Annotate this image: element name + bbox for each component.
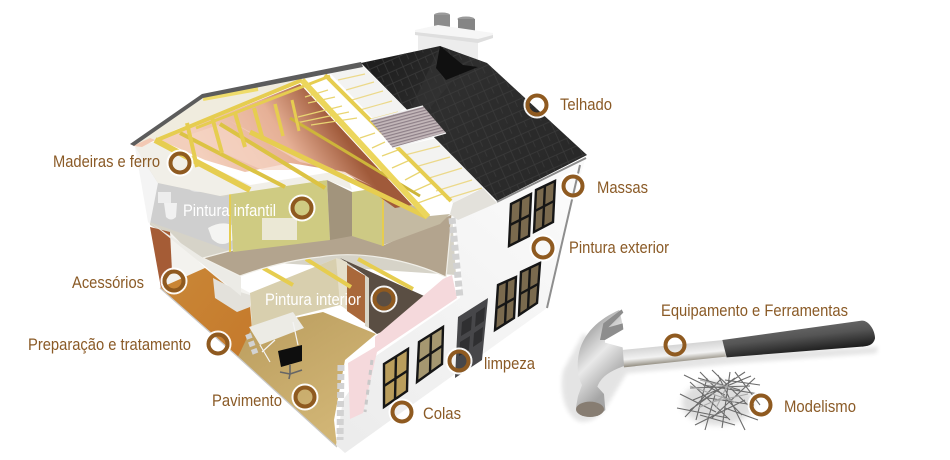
marker: Madeiras e ferro xyxy=(53,150,192,176)
marker: Pintura exterior xyxy=(530,236,669,260)
roof ridge fascia xyxy=(130,62,363,146)
hammer grip xyxy=(722,321,875,357)
upper floor carpet xyxy=(203,214,452,277)
attic timber frame xyxy=(155,75,451,217)
attic insulation boards xyxy=(186,120,372,186)
attic eave soffit xyxy=(133,72,330,146)
marker: Preparação e tratamento: Preparação e tratamento xyxy=(28,335,191,354)
gable ladder battens xyxy=(296,90,445,203)
interior back wall upper floor xyxy=(140,150,456,275)
black shingle roof xyxy=(361,46,587,202)
chimney xyxy=(415,12,493,67)
marker: Equipamento e Ferramentas xyxy=(661,301,848,354)
upper slab edge xyxy=(148,221,241,296)
pink wall insulation xyxy=(348,275,457,419)
wood floor xyxy=(160,268,252,357)
attic insulation xyxy=(160,84,412,208)
marker: Pintura exterior: Pintura exterior xyxy=(569,238,669,257)
marker: Colas: Colas xyxy=(423,404,461,423)
nails pile xyxy=(677,370,765,430)
office chair xyxy=(278,345,302,379)
exterior wall xyxy=(336,160,585,453)
marker: limpeza xyxy=(446,348,535,374)
marker: Pintura infantil xyxy=(183,196,314,220)
yellow green room walls xyxy=(230,180,450,252)
hammer head xyxy=(576,310,624,416)
desk xyxy=(249,312,304,362)
hammer striking face xyxy=(576,402,604,417)
marker: Pintura interior xyxy=(265,286,396,312)
marker: Acessórios xyxy=(72,268,186,294)
hammer claw xyxy=(600,309,623,340)
marker: Pintura infantil: Pintura infantil xyxy=(183,201,276,220)
eave pink tip xyxy=(133,138,155,147)
marker: Telhado: Telhado xyxy=(560,95,612,114)
marker: Equipamento e Ferramentas: Equipamento e Ferramentas xyxy=(661,301,848,320)
marker: Massas: Massas xyxy=(597,178,648,197)
hammer handle xyxy=(622,340,726,367)
marker: Modelismo: Modelismo xyxy=(784,397,856,416)
marker: Modelismo xyxy=(748,392,856,418)
hammer shadow xyxy=(562,333,878,422)
attic ceiling slab xyxy=(135,141,352,196)
roof battens xyxy=(338,74,482,199)
kitchen cabinet xyxy=(213,278,250,312)
marker: Telhado xyxy=(524,92,612,118)
marker: Pavimento: Pavimento xyxy=(212,391,282,410)
marker: Acessórios: Acessórios xyxy=(72,273,144,292)
windows xyxy=(384,181,555,407)
marker: limpeza: limpeza xyxy=(484,354,535,373)
marker: Massas xyxy=(560,174,648,198)
marker: Pintura interior: Pintura interior xyxy=(265,290,361,309)
bathroom wall xyxy=(135,147,234,252)
cut brick edges xyxy=(248,218,460,440)
hammer xyxy=(562,309,878,422)
floor edge xyxy=(160,288,337,447)
white insulated roof section xyxy=(330,64,483,203)
marker: Madeiras e ferro: Madeiras e ferro xyxy=(53,152,160,171)
marker: Pavimento xyxy=(212,384,318,410)
solar panel xyxy=(370,106,446,148)
lower storey back wall xyxy=(160,232,436,334)
downspout xyxy=(547,165,580,308)
floor joists xyxy=(263,259,413,289)
marker: Colas xyxy=(390,400,461,424)
wall top ledge xyxy=(450,188,497,220)
brick accent wall xyxy=(150,227,172,288)
tan floor xyxy=(238,312,376,447)
front door xyxy=(455,298,488,378)
house illustration xyxy=(130,12,587,453)
